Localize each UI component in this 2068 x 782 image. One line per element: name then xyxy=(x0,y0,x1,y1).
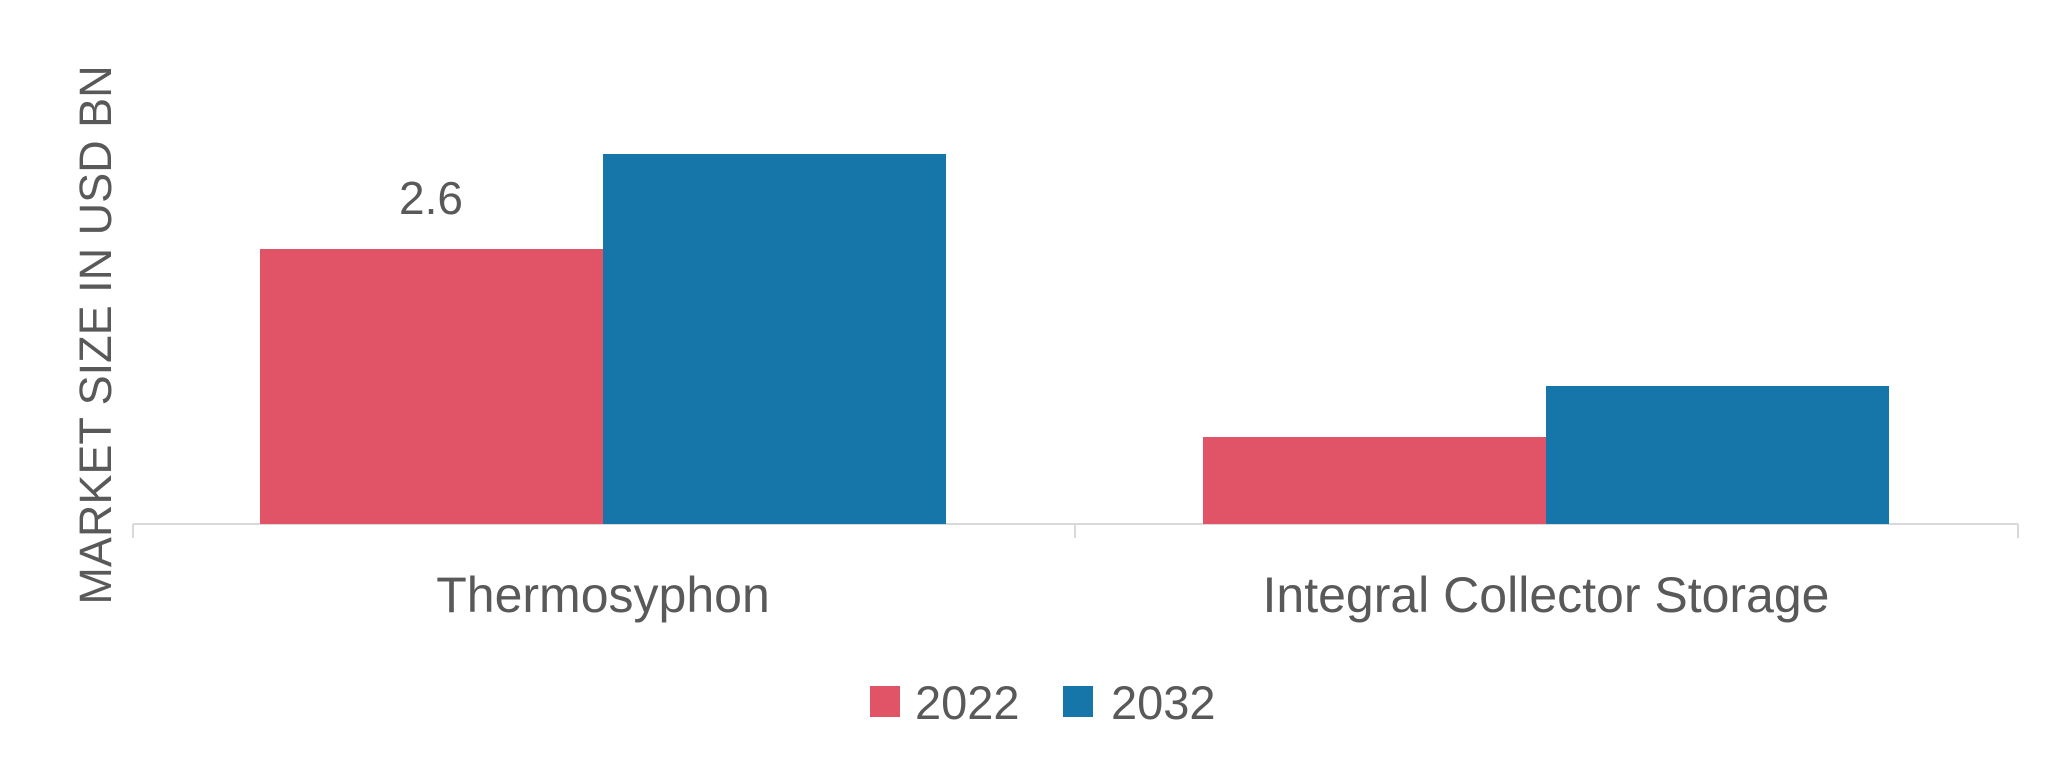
legend xyxy=(870,676,1216,729)
data label 2.6: 2.6 xyxy=(399,172,463,224)
y-axis title: MARKET SIZE IN USD BN xyxy=(70,65,121,605)
legend: 2032 xyxy=(1111,676,1216,729)
axis line xyxy=(133,524,2018,538)
category labels xyxy=(436,567,1829,623)
bars: Integral Collector Storage xyxy=(1203,386,1889,524)
category labels: Thermosyphon xyxy=(436,567,770,623)
legend: 2022 xyxy=(915,676,1020,729)
category labels: Integral Collector Storage xyxy=(1263,567,1829,623)
bars: Thermosyphon xyxy=(260,154,946,524)
